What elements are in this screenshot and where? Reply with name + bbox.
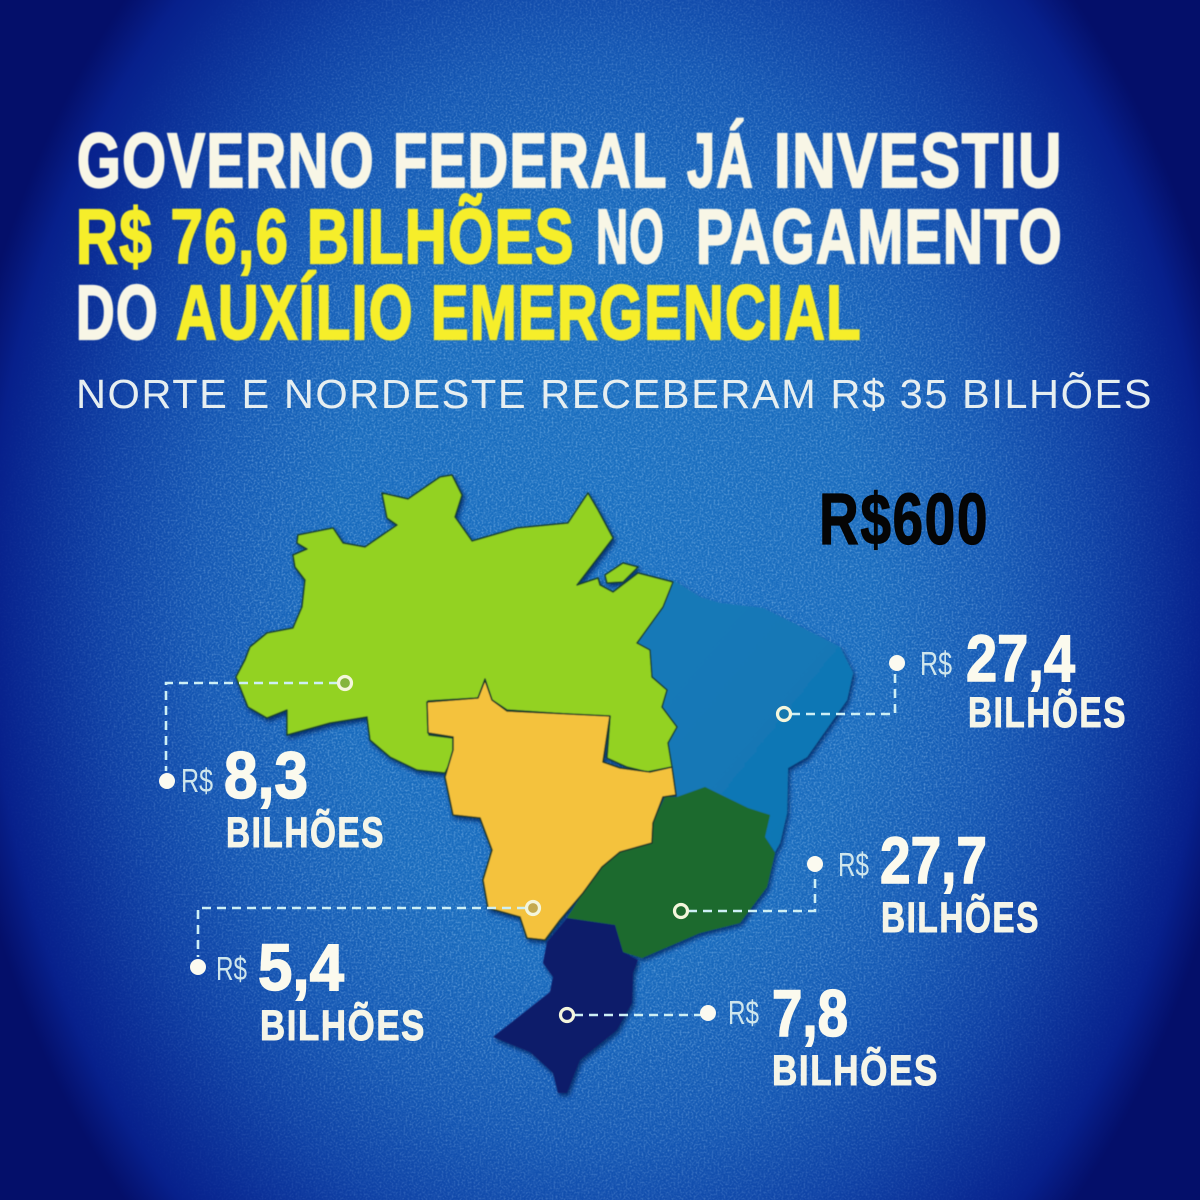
region: Sul <box>493 918 638 1093</box>
title line 2 <box>76 194 1063 280</box>
leader line <box>791 673 895 714</box>
callout: Sudeste: R$ <box>838 846 869 883</box>
leader line <box>688 875 815 911</box>
title line 3 <box>76 270 862 356</box>
title line 2: NO <box>596 194 665 280</box>
marker <box>778 708 790 720</box>
callout: Nordeste: R$ <box>920 645 952 682</box>
callout: Norte: BILHÕES <box>226 808 385 857</box>
title line 1: FEDERAL <box>393 118 668 204</box>
callout: Centro-Oeste: 5,4 <box>258 930 344 1004</box>
callout: Sudeste: BILHÕES <box>881 893 1040 942</box>
leader line <box>166 683 338 771</box>
map of Brazil <box>236 475 853 1093</box>
callout: Centro-Oeste: R$ <box>216 950 247 987</box>
marker <box>338 676 352 690</box>
callout: Norte: R$ <box>181 762 213 799</box>
R$600 label: R$600 <box>819 480 989 560</box>
callout: Sul: 7,8 <box>772 976 848 1050</box>
title <box>76 117 1063 356</box>
marker <box>674 904 688 918</box>
leader line <box>574 1014 702 1016</box>
callout: Sul <box>560 976 939 1095</box>
marker <box>560 1008 574 1022</box>
title line 2: PAGAMENTO <box>696 194 1063 280</box>
leader line <box>198 908 526 957</box>
dot <box>190 959 206 975</box>
title line 3: AUXÍLIO EMERGENCIAL <box>176 270 862 356</box>
callout: Sudeste <box>674 823 1040 942</box>
region: Amapá island <box>605 563 638 583</box>
region: Nordeste <box>637 580 853 852</box>
region: Sudeste <box>567 787 775 958</box>
callout: Sul: R$ <box>728 994 759 1031</box>
dot <box>700 1005 716 1021</box>
callout: Nordeste <box>778 621 1127 737</box>
callout: Sul: BILHÕES <box>772 1046 939 1095</box>
dot <box>159 773 175 789</box>
title line 1: GOVERNO <box>77 118 375 204</box>
title line 1: JÁ <box>687 117 754 204</box>
callout: Norte <box>159 676 385 857</box>
marker <box>526 902 540 914</box>
title line 3: DO <box>76 270 159 356</box>
callout: Norte: 8,3 <box>224 738 308 812</box>
callout: Centro-Oeste <box>190 902 540 1050</box>
callout: Sudeste: 27,7 <box>880 823 987 897</box>
title line 1 <box>77 117 1063 204</box>
region: Norte <box>236 475 677 773</box>
callout: Centro-Oeste: BILHÕES <box>260 1001 426 1050</box>
callout: Nordeste: 27,4 <box>966 621 1075 695</box>
title line 2: R$ 76,6 BILHÕES <box>76 194 575 280</box>
dot <box>889 655 905 671</box>
dot <box>807 856 823 872</box>
callout: Nordeste: BILHÕES <box>968 688 1127 737</box>
subtitle: NORTE E NORDESTE RECEBERAM R$ 35 BILHÕES <box>76 371 1153 417</box>
region: Centro-Oeste <box>427 680 676 940</box>
title line 1: INVESTIU <box>774 118 1063 204</box>
